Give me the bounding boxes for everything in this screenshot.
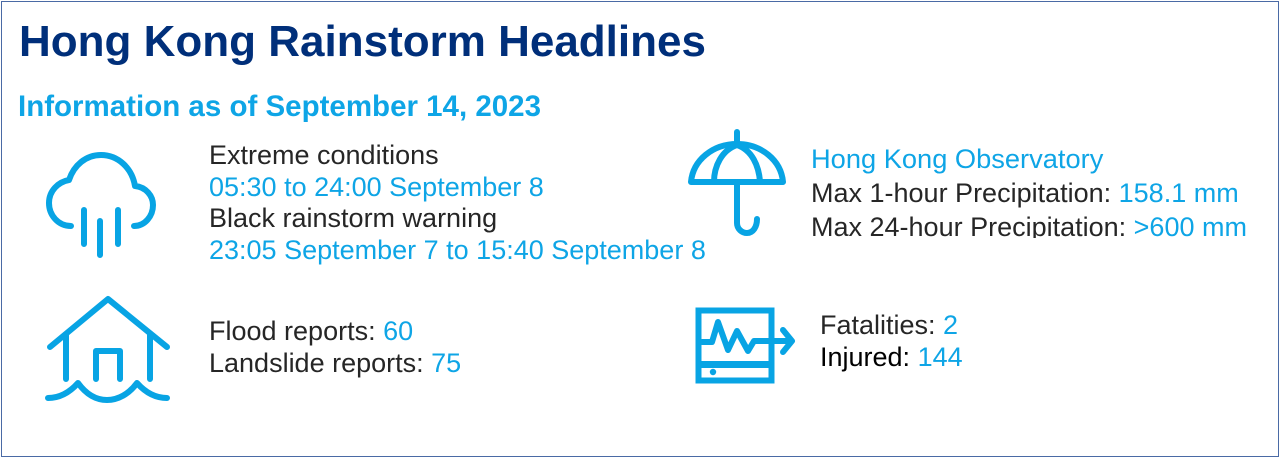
text: Hong Kong Observatory precipitation: Max 1-hour Precipitation: 158.1 mm [811, 178, 1239, 208]
text: fatalities and injured: Fatalities: 2 [820, 310, 958, 340]
text: fatalities and injured: Injured: 144 [820, 342, 963, 372]
icon: rain cloud [46, 152, 156, 258]
text: Hong Kong Observatory precipitation: Hong Kong Observatory [811, 143, 1103, 174]
icon: umbrella [688, 129, 786, 236]
icon: monitor with pulse line and arrow [696, 308, 796, 384]
text: extreme conditions and black rainstorm warning [209, 140, 706, 264]
text: fatalities and injured [820, 310, 963, 372]
text: extreme conditions and black rainstorm warning: Black rainstorm warning [209, 203, 497, 233]
subtitle: information date: Information as of September 14, 2023 [18, 90, 541, 123]
text: flood and landslide reports [209, 316, 461, 378]
text: extreme conditions and black rainstorm warning: 05:30 to 24:00 September 8 [209, 172, 544, 202]
text: extreme conditions and black rainstorm warning: Extreme conditions [209, 140, 439, 170]
text: extreme conditions and black rainstorm warning: 23:05 September 7 to 15:40 September 8 [209, 234, 706, 264]
text: Hong Kong Observatory precipitation [811, 143, 1247, 238]
text: flood and landslide reports: Flood reports: 60 [209, 316, 413, 346]
text: flood and landslide reports: Landslide reports: 75 [209, 348, 461, 378]
title: Hong Kong Rainstorm Headlines [19, 17, 706, 66]
icon: flooded house [45, 296, 170, 403]
